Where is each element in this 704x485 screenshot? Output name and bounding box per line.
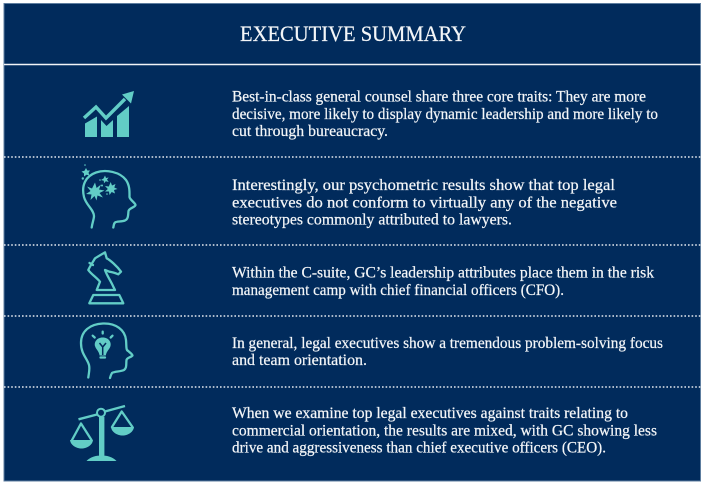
text block: core traits: cut through bureaucracy. [232, 123, 388, 140]
icon: head with sparkling stars [82, 164, 136, 228]
text block: psychometric results: executives do not conform to virtually any of the negative [232, 194, 617, 212]
text block: risk management camp: management camp with chief financial officers (CFO). [232, 282, 564, 299]
text block: core traits: decisive, more likely to display dynamic leadership and more likely to [232, 106, 658, 123]
text block: psychometric results: stereotypes commonly attributed to lawyers. [232, 212, 512, 228]
title: EXECUTIVE SUMMARY [240, 21, 466, 46]
text block: problem-solving focus: In general, legal executives show a tremendous problem-solving focus [232, 335, 663, 352]
text block: problem-solving focus: and team orientation. [232, 352, 367, 369]
text block: core traits [232, 88, 658, 140]
icon: head with lightbulb [81, 323, 132, 378]
text block: core traits: Best-in-class general counsel share three core traits: They are more [232, 88, 646, 106]
text block: risk management camp: Within the C-suite, GC’s leadership attributes place them in the risk [232, 264, 654, 282]
text block: commercial orientation: drive and aggressiveness than chief executive officers (CEO). [232, 440, 606, 456]
text block: psychometric results: Interestingly, our psychometric results show that top legal [232, 177, 616, 194]
text block: problem-solving focus [232, 335, 663, 369]
text block: psychometric results [232, 177, 617, 228]
icon: chess knight [88, 252, 123, 303]
text block: commercial orientation: commercial orientation, the results are mixed, with GC showing less [232, 422, 657, 440]
icon: rising bar chart with arrow [84, 91, 134, 137]
text block: commercial orientation: When we examine top legal executives against traits relating to [232, 405, 628, 422]
text block: risk management camp [232, 264, 654, 299]
text block: commercial orientation [232, 405, 657, 456]
icon: balance scale [70, 406, 134, 461]
